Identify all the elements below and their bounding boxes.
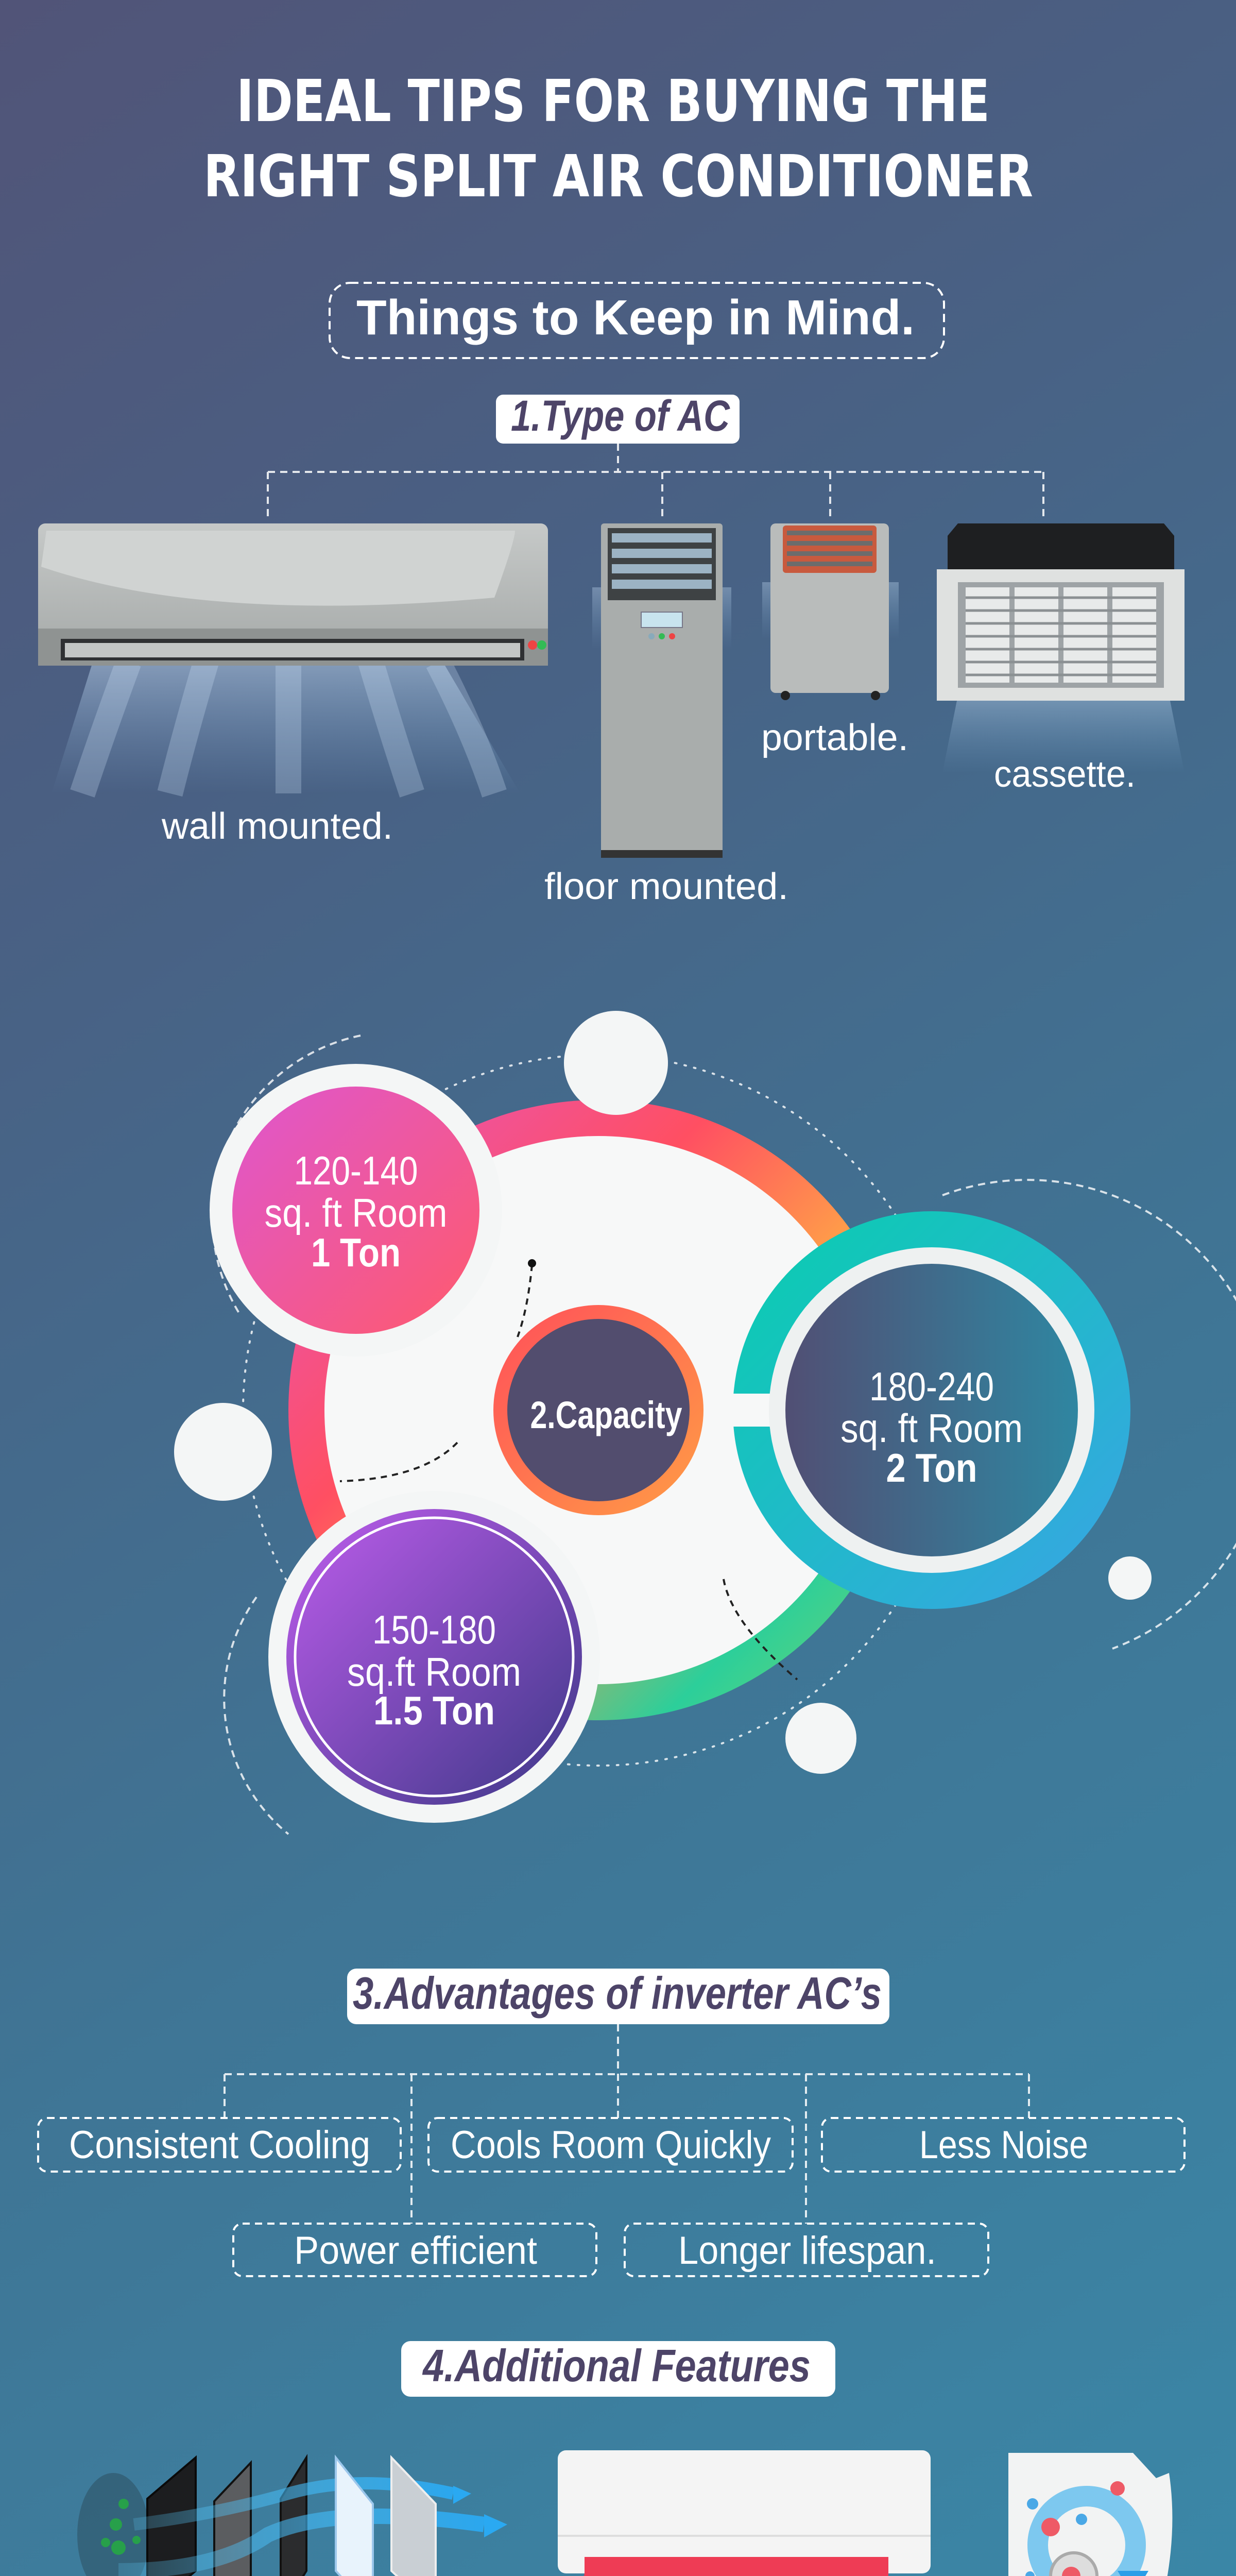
- capacity: 2 ton: [731, 1211, 1130, 1609]
- title: [203, 68, 1033, 210]
- heading: 4.Additional Features: 4.Additional Features: [422, 2340, 811, 2391]
- capacity: 1.5 ton: sq.ft Room: [347, 1649, 521, 1694]
- capacity: 2 ton: 180-240: [869, 1364, 994, 1409]
- heading: 3.Advantages of inverter AC's: 3.Advantages of inverter AC’s: [353, 1968, 882, 2019]
- capacity: 1 ton: [210, 1064, 502, 1357]
- capacity: 1.5 ton: [268, 1491, 600, 1823]
- capacity: 2 ton: sq. ft Room: [840, 1405, 1023, 1451]
- list: advantages pills: Longer lifespan.: [678, 2229, 936, 2273]
- icon: autoclean: [1008, 2453, 1172, 2576]
- subtitle: Things to Keep in Mind: Things to Keep in Mind.: [356, 290, 915, 345]
- heading: 1.Type of AC: 1.Type of AC: [511, 392, 730, 440]
- icon: portable AC: [762, 523, 899, 700]
- capacity: 1 ton: sq. ft Room: [265, 1190, 447, 1235]
- connector: advantages tree: [225, 2024, 1029, 2224]
- capacity: 1.5 ton: 1.5 Ton: [373, 1688, 495, 1733]
- list: advantages pills: Power efficient: [294, 2229, 537, 2273]
- icon: anti bacterial filter: [77, 2458, 507, 2576]
- capacity: center label: 2.Capacity: [530, 1394, 682, 1436]
- list: advantages pills: Consistent Cooling: [69, 2123, 370, 2167]
- title: IDEAL TIPS FOR BUYING THE: [236, 68, 990, 135]
- capacity: 1.5 ton: 150-180: [372, 1607, 496, 1652]
- labels: AC types: cassette.: [994, 754, 1136, 795]
- labels: AC types: portable.: [761, 717, 908, 758]
- list: advantages pills: Less Noise: [919, 2123, 1088, 2167]
- connector: type tree: [268, 444, 1043, 518]
- title: RIGHT SPLIT AIR CONDITIONER: [203, 143, 1033, 210]
- icon: cassette AC: [937, 523, 1184, 773]
- icon: wall mounted AC: [38, 523, 548, 793]
- capacity: 2 ton: 2 Ton: [886, 1445, 977, 1490]
- capacity: center label: [493, 1305, 703, 1515]
- capacity: 1 ton: 1 Ton: [311, 1230, 401, 1275]
- subtitle: Things to Keep in Mind: [330, 283, 944, 358]
- labels: AC types: floor mounted.: [544, 866, 788, 907]
- labels: AC types: [161, 717, 1136, 907]
- labels: AC types: wall mounted.: [161, 806, 393, 847]
- decorative bubbles: [174, 1011, 1152, 1774]
- list: advantages pills: [38, 2118, 1184, 2276]
- icon: in-built heater AC: [541, 2450, 931, 2576]
- icon: floor mounted AC: [592, 523, 731, 858]
- capacity: 1 ton: 120-140: [294, 1148, 418, 1193]
- list: advantages pills: Cools Room Quickly: [451, 2123, 771, 2167]
- chart: capacity diagram: [174, 1011, 1236, 1834]
